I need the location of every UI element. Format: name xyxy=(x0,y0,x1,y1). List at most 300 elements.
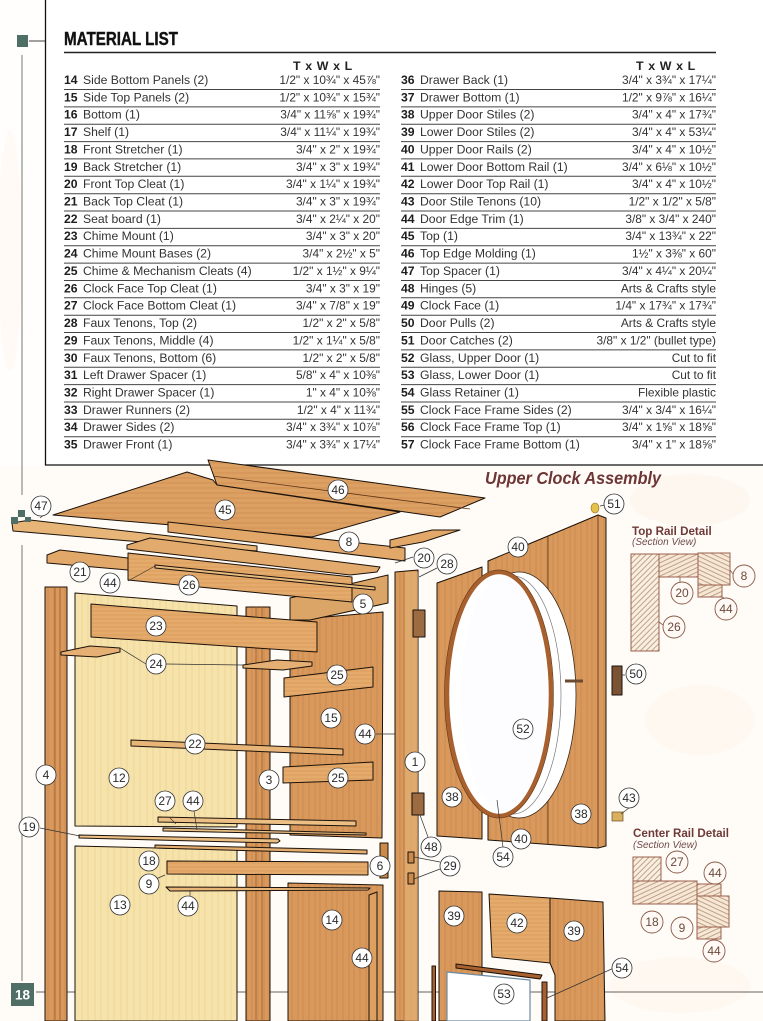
row 23: Chime Mount (1) xyxy=(83,229,174,243)
part 47: top spacer xyxy=(12,520,257,551)
part 26: clock face top cleat xyxy=(128,553,352,602)
part 19: back stretcher xyxy=(79,835,280,843)
row 45: 3/4" x 13¾" x 22" xyxy=(625,229,716,243)
row 25: 25 xyxy=(64,264,78,278)
row 42 xyxy=(401,177,716,194)
part 6: right drawer spacer xyxy=(380,843,388,878)
callout 5 xyxy=(353,594,373,614)
callout 27 xyxy=(155,791,175,811)
callout 53: 53 xyxy=(497,987,511,1001)
callout 39 xyxy=(564,921,584,941)
part 49: circular opening xyxy=(462,572,576,818)
callout 3: 3 xyxy=(266,773,273,787)
heading rule xyxy=(64,52,716,54)
row 37: Drawer Bottom (1) xyxy=(420,90,520,104)
row 33: 1/2" x 4" x 11¾" xyxy=(297,403,380,417)
row 57: Clock Face Frame Bottom (1) xyxy=(420,438,580,452)
row 43 xyxy=(401,194,716,211)
callout 54 xyxy=(493,847,513,867)
row 53: Cut to fit xyxy=(672,368,717,382)
callout 44: 44 xyxy=(186,794,200,808)
callout 39: 39 xyxy=(567,924,581,938)
row 42: 42 xyxy=(401,177,415,191)
callout 9: 9 xyxy=(146,877,153,891)
part 5: upper spacer block xyxy=(290,575,388,620)
small registration squares xyxy=(11,510,31,524)
callout 21 xyxy=(70,562,90,582)
row 21: 3/4" x 3" x 19¾" xyxy=(296,194,380,208)
callout 44 xyxy=(100,573,120,593)
material list table: right column xyxy=(401,59,717,452)
row 25: Chime & Mechanism Cleats (4) xyxy=(83,264,252,278)
row 15: Side Top Panels (2) xyxy=(83,90,189,104)
row 21: Back Top Cleat (1) xyxy=(83,194,183,208)
heading: upper clock assembly: Upper Clock Assembly xyxy=(485,468,662,488)
callout 12: 12 xyxy=(112,771,126,785)
screw xyxy=(565,680,583,682)
row 15: 1/2" x 10¾" x 15¾" xyxy=(279,90,380,104)
row 43: 43 xyxy=(401,194,415,208)
row 50: 50 xyxy=(401,316,415,330)
upper door xyxy=(437,503,623,848)
row 22: Seat board (1) xyxy=(83,212,161,226)
row 17 xyxy=(64,125,380,142)
part 3: center leg xyxy=(246,607,270,1021)
callout 38: 38 xyxy=(445,790,459,804)
callout 39: 39 xyxy=(447,909,461,923)
row 26 xyxy=(64,281,380,298)
row 39: Lower Door Stiles (2) xyxy=(420,125,534,139)
row 18 xyxy=(64,142,380,159)
row 35: Drawer Front (1) xyxy=(83,438,172,452)
row 43: Door Stile Tenons (10) xyxy=(420,194,541,208)
row 25 xyxy=(64,264,380,280)
row 33: 33 xyxy=(64,403,78,417)
faux tenon upper xyxy=(408,852,414,863)
row 53: Glass, Lower Door (1) xyxy=(420,368,539,382)
part 39: right stile xyxy=(550,898,605,1021)
row 24: 3/4" x 2½" x 5" xyxy=(303,247,380,261)
callout 44 xyxy=(352,948,372,968)
row 19 xyxy=(64,160,380,176)
part 4: left leg xyxy=(45,587,67,1021)
heading: material list: MATERIAL LIST xyxy=(64,29,178,49)
callout 40: 40 xyxy=(514,832,528,846)
callout 14 xyxy=(322,910,342,930)
row 49: 49 xyxy=(401,299,415,313)
row 22: 3/4" x 2¼" x 20" xyxy=(296,212,380,226)
inner retainer line xyxy=(465,576,561,814)
row 48: Arts & Crafts style xyxy=(621,281,716,295)
row 20 xyxy=(64,177,380,194)
row 29: 1/2" x 1¼" x 5/8" xyxy=(293,333,380,347)
callout 44: 44 xyxy=(355,951,369,965)
callout 26: 26 xyxy=(667,620,681,634)
row 30: 1/2" x 2" x 5/8" xyxy=(303,351,380,365)
right molding return xyxy=(390,530,460,548)
parts 38 and 40: right door panel xyxy=(488,515,606,848)
row 51: 3/8" x 1/2" (bullet type) xyxy=(597,333,716,347)
row 14: 1/2" x 10¾" x 45⅞" xyxy=(279,73,380,87)
row 38: 3/4" x 4" x 17¾" xyxy=(632,108,716,122)
material list frame xyxy=(46,0,763,465)
part 14: side bottom panel xyxy=(288,883,383,1021)
section 9 xyxy=(697,896,729,927)
callout 1 xyxy=(405,752,425,772)
row 21: 21 xyxy=(64,194,78,208)
row 39: 3/4" x 4" x 53¼" xyxy=(632,125,716,139)
row 38 xyxy=(401,108,716,124)
hinge upper xyxy=(413,610,425,637)
row 29: 29 xyxy=(64,333,78,347)
callout 51 xyxy=(604,494,624,514)
row 41: 41 xyxy=(401,160,415,174)
callout 38 xyxy=(571,804,591,824)
row 22 xyxy=(64,212,380,228)
row 57: 3/4" x 1" x 18⅝" xyxy=(632,438,716,452)
row 31: Left Drawer Spacer (1) xyxy=(83,368,206,382)
row 35 xyxy=(64,438,380,452)
callout 52: 52 xyxy=(516,722,530,736)
callout 38: 38 xyxy=(574,807,588,821)
part 44: lower trim xyxy=(166,887,370,891)
row 53: 53 xyxy=(401,368,415,382)
callout numbers on main drawing xyxy=(19,480,646,1004)
callout 25: 25 xyxy=(330,668,344,682)
row 14 xyxy=(64,73,380,90)
row 37: 37 xyxy=(401,90,415,104)
faux tenon lower xyxy=(408,873,414,884)
row 41: 3/4" x 6⅛" x 10½" xyxy=(622,160,716,174)
row 14: Side Bottom Panels (2) xyxy=(83,73,208,87)
callout 40 xyxy=(511,829,531,849)
callout 6: 6 xyxy=(377,859,384,873)
part 45: top board xyxy=(53,472,400,537)
callout 26: 26 xyxy=(182,578,196,592)
callout 23: 23 xyxy=(149,619,163,633)
door stile divider xyxy=(548,515,598,848)
callout 42: 42 xyxy=(510,916,524,930)
row 36 xyxy=(401,73,716,90)
ring outer line xyxy=(444,570,554,818)
row 35: 35 xyxy=(64,438,78,452)
row 34: Drawer Sides (2) xyxy=(83,420,174,434)
row 29 xyxy=(64,333,380,350)
callout 44 xyxy=(355,724,375,744)
part 18: front stretcher xyxy=(155,845,367,854)
lower door xyxy=(432,891,605,1021)
row 39 xyxy=(401,125,716,142)
callout 48: 48 xyxy=(424,840,438,854)
row 16: Bottom (1) xyxy=(83,108,140,122)
column header: T x W x L xyxy=(636,59,696,73)
row 14: 14 xyxy=(64,73,78,87)
row 26: Clock Face Top Cleat (1) xyxy=(83,281,217,295)
detail callouts xyxy=(641,851,726,962)
row 40: 3/4" x 4" x 10½" xyxy=(632,142,716,156)
row 24: 24 xyxy=(64,247,78,261)
callout 45: 45 xyxy=(218,503,232,517)
part 22: seat board xyxy=(131,740,343,755)
exploded cabinet illustration xyxy=(12,460,485,1021)
row 36: 36 xyxy=(401,73,415,87)
row 17: 17 xyxy=(64,125,78,139)
callout 25 xyxy=(328,768,348,788)
callout 47: 47 xyxy=(34,499,48,513)
row 48: Hinges (5) xyxy=(420,281,476,295)
row 31: 31 xyxy=(64,368,78,382)
center rail detail xyxy=(633,827,729,962)
row 51: 51 xyxy=(401,333,415,347)
part 42: top rail xyxy=(489,894,550,963)
row 34 xyxy=(64,420,380,437)
row 44 xyxy=(401,212,716,228)
row 33: Drawer Runners (2) xyxy=(83,403,190,417)
row 19: 19 xyxy=(64,160,78,174)
callout 26 xyxy=(179,575,199,595)
callout 45 xyxy=(215,500,235,520)
panel 12: upper back xyxy=(75,593,237,827)
row 50: Arts & Crafts style xyxy=(621,316,716,330)
callout 4: 4 xyxy=(43,768,50,782)
part 46: top edge molding xyxy=(208,460,485,517)
row 36: Drawer Back (1) xyxy=(420,73,508,87)
callout 18 xyxy=(139,851,159,871)
callout 20: 20 xyxy=(417,551,431,565)
row 16: 3/4" x 11⅝" x 19¾" xyxy=(280,108,380,122)
row 20: 3/4" x 1¼" x 19¾" xyxy=(286,177,380,191)
row 36: 3/4" x 3¾" x 17¼" xyxy=(622,73,716,87)
row 54 xyxy=(401,386,716,402)
callout 29: 29 xyxy=(443,859,457,873)
callout 54: 54 xyxy=(615,961,629,975)
callout 50: 50 xyxy=(629,667,643,681)
row 23 xyxy=(64,229,380,246)
part 1: door stile xyxy=(395,570,418,1021)
row 46: Top Edge Molding (1) xyxy=(420,247,536,261)
part 15: side top panel xyxy=(290,612,383,838)
callout 1: 1 xyxy=(412,755,419,769)
row 34: 3/4" x 3¾" x 10⅞" xyxy=(286,420,380,434)
callout 8: 8 xyxy=(741,569,748,583)
row 51 xyxy=(401,333,716,350)
callout 29 xyxy=(440,856,460,876)
top rail detail xyxy=(631,525,755,651)
row 30: Faux Tenons, Bottom (6) xyxy=(83,351,216,365)
part 9: rail xyxy=(167,861,368,875)
callout 18: 18 xyxy=(645,915,659,929)
section 8 xyxy=(698,553,730,585)
row 48 xyxy=(401,281,716,298)
row 15 xyxy=(64,90,380,107)
callout 44: 44 xyxy=(719,602,733,616)
callout 13: 13 xyxy=(113,898,127,912)
row 57: 57 xyxy=(401,438,415,452)
section view caption: (Section View) xyxy=(632,537,696,548)
row 30 xyxy=(64,351,380,367)
row 25: 1/2" x 1½" x 9¼" xyxy=(293,264,380,278)
row 56: Clock Face Frame Top (1) xyxy=(420,420,561,434)
row 16 xyxy=(64,108,380,124)
callout 43 xyxy=(619,788,639,808)
callout 50 xyxy=(626,664,646,684)
callout 20 xyxy=(414,548,434,568)
row 24: Chime Mount Bases (2) xyxy=(83,247,211,261)
row 45: Top (1) xyxy=(420,229,458,243)
callout 14: 14 xyxy=(325,913,339,927)
callout 18: 18 xyxy=(142,854,156,868)
part 24: chime mount base right xyxy=(243,660,312,670)
row 46: 46 xyxy=(401,247,415,261)
row 28: 28 xyxy=(64,316,78,330)
row 52: Cut to fit xyxy=(672,351,717,365)
callout 13 xyxy=(110,895,130,915)
row 32: Right Drawer Spacer (1) xyxy=(83,386,214,400)
callout 43: 43 xyxy=(622,791,636,805)
row 47 xyxy=(401,264,716,280)
callout 15 xyxy=(321,708,341,728)
callout 44 xyxy=(178,896,198,916)
row 40 xyxy=(401,142,716,159)
row 44: Door Edge Trim (1) xyxy=(420,212,524,226)
callout 40: 40 xyxy=(511,540,525,554)
callout 27: 27 xyxy=(670,855,684,869)
part 24: chime mount base left xyxy=(61,646,120,657)
callout 42 xyxy=(507,913,527,933)
part 43: tenon xyxy=(612,812,623,821)
callout 22 xyxy=(185,734,205,754)
part 20 front top cleat xyxy=(127,538,380,575)
callout 25: 25 xyxy=(331,771,345,785)
callout 20: 20 xyxy=(675,586,689,600)
row 19: Back Stretcher (1) xyxy=(83,160,181,174)
row 41: Lower Door Bottom Rail (1) xyxy=(420,160,568,174)
row 55: 55 xyxy=(401,403,415,417)
part 27: bottom cleat xyxy=(158,817,356,826)
row 54: Glass Retainer (1) xyxy=(420,386,519,400)
callout 22: 22 xyxy=(188,737,202,751)
row 44: 3/8" x 3/4" x 240" xyxy=(625,212,716,226)
detail title: Top Rail Detail xyxy=(632,525,712,538)
row 34: 34 xyxy=(64,420,78,434)
row 42: 3/4" x 4" x 10½" xyxy=(632,177,716,191)
row 49: Clock Face (1) xyxy=(420,299,499,313)
row 46: 1½" x 3⅜" x 60" xyxy=(632,247,716,261)
callout 54 xyxy=(612,958,632,978)
retainer top xyxy=(456,964,542,979)
row 18: 3/4" x 2" x 19¾" xyxy=(296,142,380,156)
column header: T x W x L xyxy=(293,59,353,73)
callout 46 xyxy=(328,480,348,500)
section view caption: (Section View) xyxy=(633,840,697,851)
callout 24: 24 xyxy=(149,657,163,671)
material list table: left column xyxy=(64,59,380,452)
row 38: Upper Door Stiles (2) xyxy=(420,108,534,122)
callout 27: 27 xyxy=(158,794,172,808)
callout 19 xyxy=(19,817,39,837)
door side assembly xyxy=(395,570,425,1021)
row 55 xyxy=(401,403,716,419)
row 47: 3/4" x 4¼" x 20¼" xyxy=(622,264,716,278)
callout 51: 51 xyxy=(607,497,621,511)
hinge lower xyxy=(412,793,424,815)
part 54 and frame ring xyxy=(447,572,551,816)
row 50 xyxy=(401,316,716,332)
callout 44: 44 xyxy=(103,576,117,590)
callout 44: 44 xyxy=(181,899,195,913)
panel 13: lower back xyxy=(75,846,237,1021)
row 37: 1/2" x 9⅞" x 16¼" xyxy=(622,90,716,104)
row 27: 3/4" x 7/8" x 19" xyxy=(296,299,380,313)
retainer right xyxy=(542,982,547,1021)
row 32 xyxy=(64,386,380,402)
row 49 xyxy=(401,299,716,315)
row 28: Faux Tenons, Top (2) xyxy=(83,316,197,330)
row 56: 56 xyxy=(401,420,415,434)
callout 8: 8 xyxy=(346,535,353,549)
row 55: Clock Face Frame Sides (2) xyxy=(420,403,572,417)
row 52: Glass, Upper Door (1) xyxy=(420,351,539,365)
row 31: 5/8" x 4" x 10⅜" xyxy=(296,368,380,382)
row 43: 1/2" x 1/2" x 5/8" xyxy=(629,194,716,208)
callout 52 xyxy=(513,719,533,739)
callout 39 xyxy=(444,906,464,926)
row 26: 3/4" x 3" x 19" xyxy=(306,281,380,295)
callout 47 xyxy=(31,496,51,516)
row 22: 22 xyxy=(64,212,78,226)
row 53 xyxy=(401,368,717,385)
part 23: chime mount xyxy=(91,604,317,652)
row 30: 30 xyxy=(64,351,78,365)
callout 8 xyxy=(339,532,359,552)
row 57 xyxy=(401,438,716,452)
row 18: 18 xyxy=(64,142,78,156)
detail title: Center Rail Detail xyxy=(633,827,729,840)
row 18: Front Stretcher (1) xyxy=(83,142,183,156)
callout 46: 46 xyxy=(331,483,345,497)
row 32: 1" x 4" x 10⅜" xyxy=(306,386,380,400)
row 40: 40 xyxy=(401,142,415,156)
callout 9 xyxy=(139,874,159,894)
row 37 xyxy=(401,90,716,107)
row 46 xyxy=(401,247,716,263)
leader lines xyxy=(40,505,629,998)
callout 44: 44 xyxy=(358,727,372,741)
row 54: 54 xyxy=(401,386,415,400)
part 44: trim strip xyxy=(163,828,366,835)
callout 19: 19 xyxy=(22,820,36,834)
part 52: glass xyxy=(461,577,547,811)
section 44 lower xyxy=(697,927,721,939)
callout 3 xyxy=(259,770,279,790)
row 54: Flexible plastic xyxy=(638,386,716,400)
callout 48 xyxy=(421,837,441,857)
retainer left xyxy=(432,966,436,1021)
callout 21: 21 xyxy=(73,565,87,579)
part 44: trim on cleat xyxy=(155,565,375,590)
row 32: 32 xyxy=(64,386,78,400)
row 27: 27 xyxy=(64,299,78,313)
callout 28: 28 xyxy=(440,557,454,571)
callout 44: 44 xyxy=(708,866,722,880)
callout 9: 9 xyxy=(679,921,686,935)
row 31 xyxy=(64,368,380,385)
row 21 xyxy=(64,194,380,211)
callout 23 xyxy=(146,616,166,636)
row 28 xyxy=(64,316,380,332)
part 44: vertical trim xyxy=(369,892,377,1021)
part 39: left stile xyxy=(439,891,482,1021)
